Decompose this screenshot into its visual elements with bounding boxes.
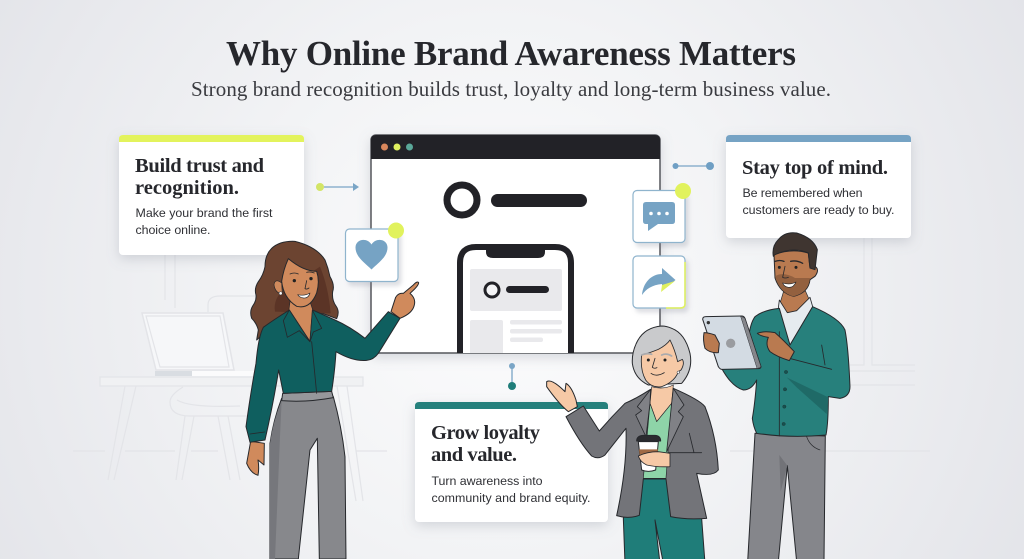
- background line art: office desk and laptop: [73, 238, 930, 501]
- card text: Make your brand the first: [136, 206, 273, 220]
- tile: share: [633, 256, 685, 308]
- browser title bar: [371, 135, 660, 159]
- chat dots: [649, 212, 669, 215]
- tile: heart: [346, 222, 404, 282]
- lapels: [636, 388, 684, 452]
- cardigan buttons: [782, 370, 788, 426]
- chat icon: [643, 202, 675, 231]
- chest: [289, 302, 313, 342]
- card: grow loyalty: [415, 402, 608, 522]
- phone mockup: [460, 246, 571, 353]
- person: man with tablet: [703, 233, 850, 559]
- man head: [773, 233, 817, 296]
- card text: Turn awareness into: [432, 474, 543, 488]
- connector: right: [672, 162, 714, 170]
- lime dot: [388, 222, 404, 238]
- woman body: [246, 241, 419, 559]
- connector: left arrow: [316, 183, 359, 191]
- card text: community and brand equity.: [432, 491, 590, 505]
- waistband: [282, 391, 333, 401]
- card accent: teal: [415, 402, 608, 409]
- tile: chat: [633, 183, 691, 242]
- brand name bar: [491, 194, 587, 207]
- window dots: [381, 144, 413, 150]
- older woman head: [632, 326, 691, 387]
- card text: Be remembered when: [742, 186, 863, 200]
- card heading: and value.: [431, 444, 517, 466]
- title: Why Online Brand Awareness Matters: [226, 34, 796, 73]
- neck: [650, 385, 673, 422]
- green top: [643, 403, 672, 478]
- lime dot: [675, 183, 691, 199]
- person: woman pointing: [246, 241, 419, 559]
- left hand: [247, 441, 264, 475]
- cardigan: [722, 307, 850, 436]
- pointing hand: [757, 332, 794, 361]
- man torso: [703, 290, 850, 436]
- pants: [623, 477, 705, 559]
- browser window: [371, 135, 660, 353]
- shirt: [778, 297, 813, 345]
- card: build trust: [119, 135, 304, 255]
- hair: [251, 241, 338, 340]
- coffee cup: [638, 442, 658, 471]
- card accent: blue: [726, 135, 911, 142]
- card: stay top of mind: [726, 135, 911, 238]
- older woman body: [547, 381, 718, 559]
- blazer: [566, 388, 718, 519]
- holding hand: [704, 333, 719, 353]
- tablet: [703, 316, 761, 369]
- blouse: [246, 310, 400, 442]
- connector: bottom: [508, 363, 516, 390]
- neck: [780, 290, 812, 345]
- man legs: [748, 433, 825, 559]
- open hand: [547, 381, 577, 412]
- card text: choice online.: [136, 223, 210, 237]
- heart icon: [356, 240, 388, 270]
- person: older woman with coffee: [547, 326, 718, 559]
- pants: [270, 397, 346, 559]
- card heading: Build trust and: [135, 155, 265, 177]
- card accent: lime: [119, 135, 304, 142]
- pointing hand: [391, 282, 419, 318]
- card heading: recognition.: [135, 177, 239, 199]
- brand logo ring: [447, 185, 477, 215]
- card heading: Stay top of mind.: [742, 157, 888, 179]
- collar: [283, 310, 322, 342]
- subtitle: Strong brand recognition builds trust, loyalty and long-term business value.: [191, 77, 831, 101]
- share arrow icon: [642, 268, 676, 295]
- card text: customers are ready to buy.: [742, 203, 894, 217]
- card heading: Grow loyalty: [431, 422, 541, 444]
- hand on cup: [638, 452, 670, 467]
- woman head: [274, 259, 318, 307]
